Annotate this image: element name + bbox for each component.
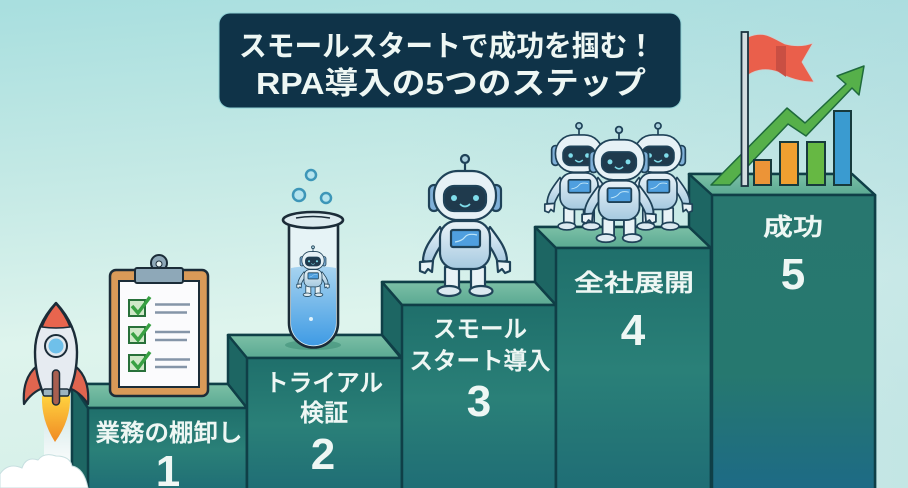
step 4 block [535,227,711,488]
title box: RPA導入の5つのステップ [256,66,646,101]
step 4 label: 全社展開 [574,270,694,297]
step 3 block [382,282,556,488]
step 2 label: 2 [311,430,335,479]
icon: clipboard checklist [110,255,208,396]
step 4 label: 4 [621,306,646,355]
title box [219,13,681,108]
icon: growth arrow [711,66,864,185]
step 2 label [265,370,383,479]
icon: test tube with robot [283,170,343,350]
step 3 label: 3 [467,377,491,426]
icon: red flag [742,32,814,186]
icon: rocket with exhaust [0,303,88,488]
icon: robot group [545,123,692,242]
step 5 label: 5 [781,250,805,299]
step 1 label [96,420,242,488]
step 3 label: スモール [433,316,527,343]
step 1 label: 業務の棚卸し [96,420,242,447]
step 4 label [574,270,694,355]
step 2 label: トライアル [265,370,383,397]
step 3 label [410,316,550,426]
step 5 label: 成功 [763,214,823,241]
step 1 block [72,384,247,488]
step 5 label [763,214,823,299]
step 3 label: スタート導入 [410,348,550,375]
icon: single robot [420,155,510,296]
icon: bar chart [754,111,851,185]
title box: スモールスタートで成功を掴む！ [239,30,655,63]
step 2 label: 検証 [300,400,348,427]
step 5 block [689,174,875,488]
step 2 block [228,335,402,488]
